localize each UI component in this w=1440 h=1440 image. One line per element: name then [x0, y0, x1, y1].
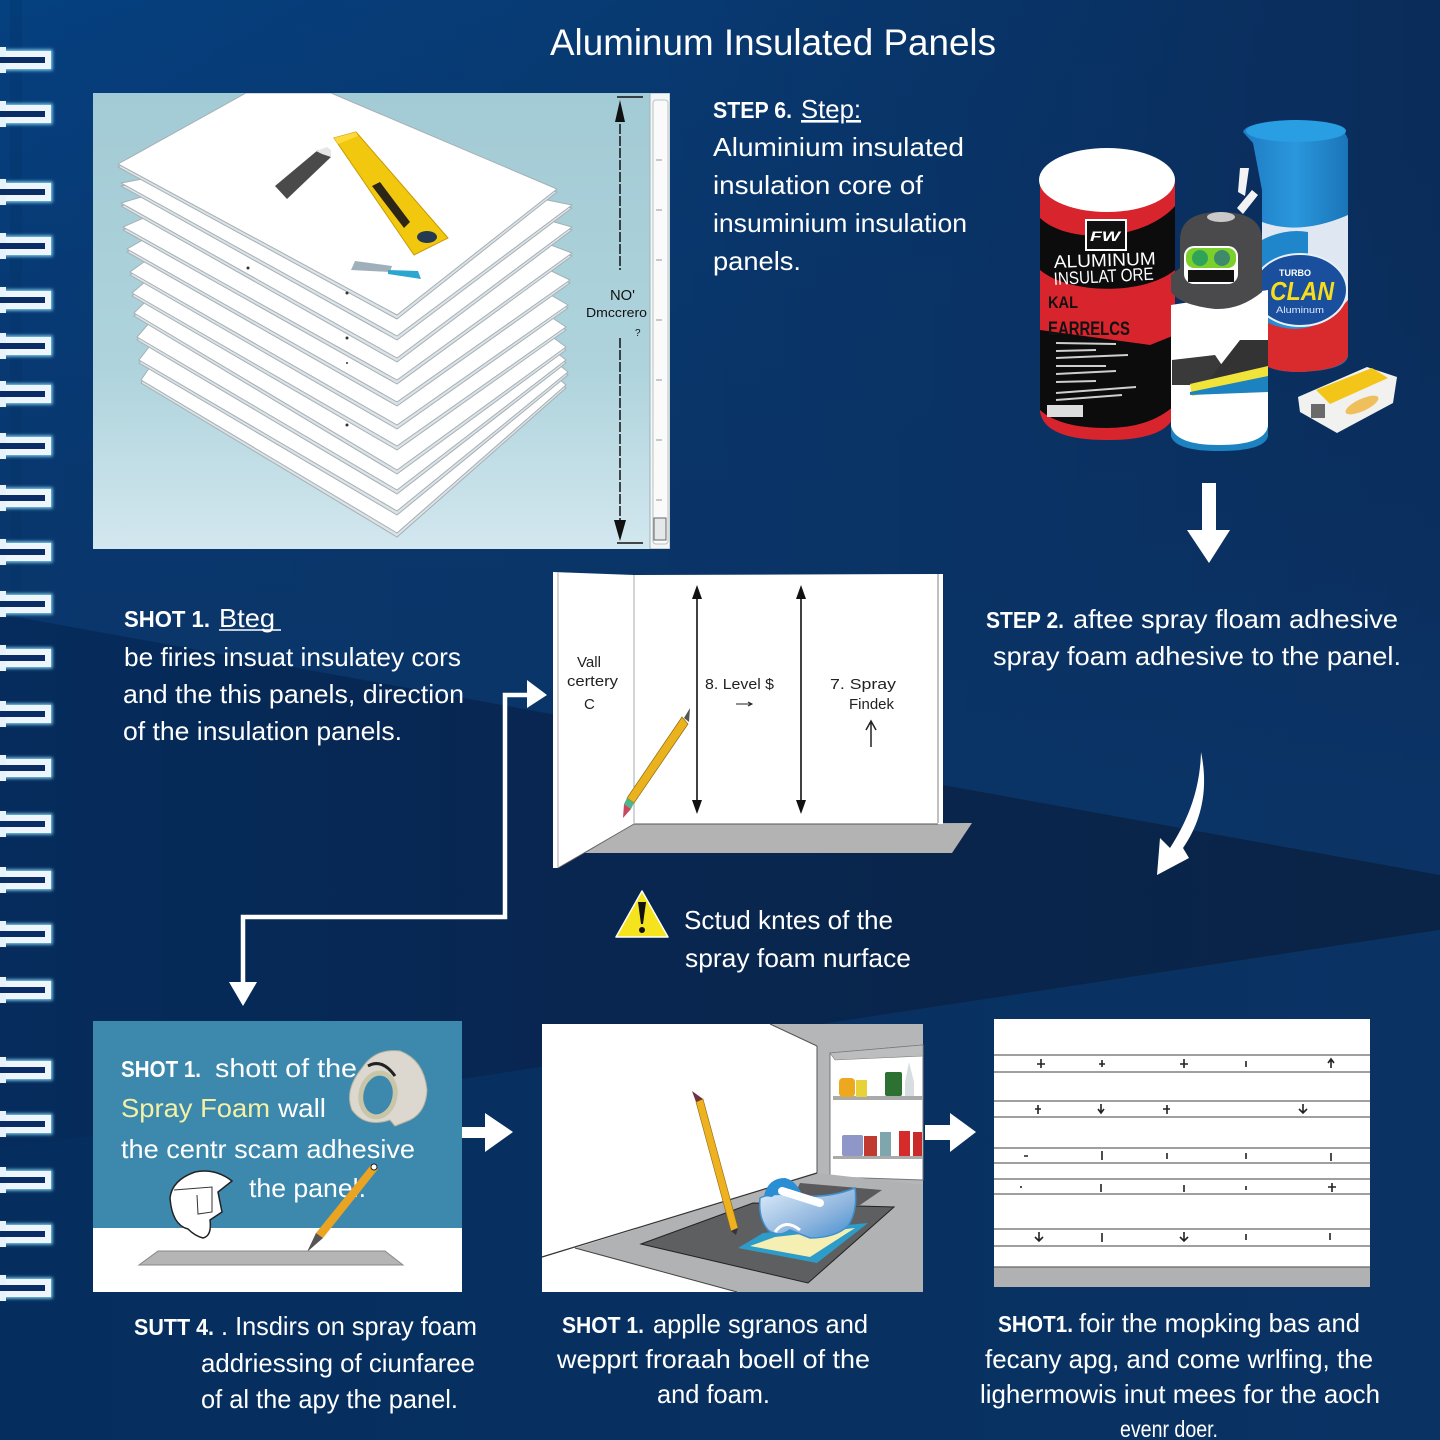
text block: step 6: Step: [801, 94, 861, 124]
panel: floor mat and goggles [542, 1024, 923, 1292]
white can with gauge cap [1171, 212, 1268, 451]
blue spray can [1237, 120, 1348, 372]
title: Aluminum Insulated Panels [550, 22, 996, 63]
icon: utility knife [275, 147, 331, 199]
text block: step 6: insulation core of [713, 170, 924, 200]
layout marks [1021, 1059, 1336, 1242]
icon: goggles [760, 1178, 856, 1238]
text block: shot 1 left: Bteg [219, 603, 275, 633]
text block: shot 1 left: and the this panels, direction [123, 679, 464, 709]
spiral binding [0, 47, 49, 1301]
wall labels: Vall [577, 654, 601, 671]
red and black can [1039, 148, 1175, 440]
red and black can: ALUMINUM [1053, 248, 1156, 272]
icon: scraper [351, 261, 421, 279]
panel text [121, 1053, 415, 1203]
arrow: down from cans [1187, 483, 1230, 563]
wall labels: 8. Level $ [705, 676, 775, 693]
text block: caption three: fecany apg, and come wrlfing, the [985, 1344, 1373, 1374]
text block: shot 1 left: of the insulation panels. [123, 716, 402, 746]
grey bar [139, 1251, 403, 1265]
text block: caption one: addriessing of ciunfaree [201, 1348, 475, 1378]
text block: caption two: and foam. [657, 1379, 770, 1409]
text block: shot 1 left: be firies insuat insulatey cors [124, 642, 461, 672]
text block: caption three: SHOT1. [998, 1311, 1073, 1337]
text block: step 6: Aluminium insulated [713, 132, 964, 162]
screw marks [246, 266, 348, 426]
icon: pencil [307, 1164, 378, 1252]
text block: caption two: SHOT 1. [562, 1312, 644, 1338]
floor mats [790, 1183, 882, 1205]
floor [575, 1173, 923, 1292]
dimension label [587, 290, 646, 336]
ruler strip [650, 93, 670, 549]
panel text: the panel. [249, 1173, 366, 1203]
sponge [738, 1223, 868, 1263]
text block: caption one: . Insdirs on spray foam [221, 1311, 477, 1341]
arrow: to panel three [925, 1113, 976, 1152]
blue spray can: CLAN [1270, 276, 1335, 306]
double arrow 2 [796, 585, 806, 814]
callout: warning: spray foam nurface [685, 943, 911, 973]
icon: pencil [623, 708, 690, 818]
text block: step 6 [713, 94, 967, 276]
dimension label: ? [635, 328, 641, 339]
icon: helmet [170, 1171, 232, 1238]
text block: caption one: of al the apy the panel. [201, 1384, 458, 1414]
panel text: SHOT 1. [121, 1056, 201, 1082]
red and black can: FW [1090, 228, 1122, 244]
text block: step 2: STEP 2. [986, 607, 1064, 633]
shelf unit [830, 1045, 923, 1180]
text block: step 6: insuminium insulation [713, 208, 967, 238]
text block: step 6: panels. [713, 246, 801, 276]
double arrow 1 [692, 585, 702, 814]
panel text: wall [277, 1093, 326, 1123]
wall labels: Findek [849, 696, 894, 713]
text block: caption three: lighermowis inut mees for the aoch [980, 1379, 1380, 1409]
stack of panels [118, 93, 572, 537]
back wall [634, 574, 943, 824]
text block: shot 1 left [123, 603, 464, 746]
wall labels: certery [567, 673, 619, 690]
dimension arrow [614, 97, 643, 543]
product group: adhesive cans [1039, 120, 1397, 451]
text block: step 6: STEP 6. [713, 97, 792, 123]
panel: stacked insulated panels [93, 93, 670, 549]
panel: marked panel lines [994, 1019, 1370, 1287]
arrow: elbow connector [229, 680, 547, 1006]
icon: pencil [692, 1091, 738, 1235]
arrow: to panel two [462, 1113, 513, 1152]
text block: caption three [980, 1308, 1380, 1440]
callout: warning [616, 891, 911, 973]
icon: warning triangle [616, 891, 668, 937]
wall labels [567, 654, 897, 747]
text block: step 2: aftee spray floam adhesive [1073, 604, 1398, 634]
back wall [770, 1024, 923, 1190]
blue spray can: Aluminum [1276, 305, 1324, 315]
text block: caption two [556, 1309, 870, 1409]
red and black can: EARRELCS [1048, 319, 1130, 340]
panel: wall diagram [553, 572, 972, 868]
panel text: Spray Foam [121, 1093, 270, 1123]
floor [585, 823, 972, 853]
side wall [553, 572, 634, 868]
text block: step 2: spray foam adhesive to the panel. [993, 641, 1401, 671]
icon: yellow level [334, 132, 448, 255]
text block: caption two: applle sgranos and [653, 1309, 868, 1339]
text block: shot 1 left: SHOT 1. [124, 606, 210, 632]
text block: caption two: wepprt froraah boell of the [556, 1344, 870, 1374]
yellow connector block [1298, 367, 1397, 433]
text block: caption three: foir the mopking bas and [1079, 1308, 1360, 1338]
icon: tape roll [350, 1051, 427, 1126]
wall labels: 7. Spray [830, 676, 897, 693]
panel text: shott of the [215, 1053, 357, 1083]
panel text: the centr scam adhesive [121, 1134, 415, 1164]
panel: spray foam shot [93, 1021, 462, 1292]
text block: step 2 [986, 604, 1401, 671]
red and black can: KAL [1048, 293, 1078, 312]
text block: caption one: SUTT 4. [134, 1314, 214, 1340]
wall labels: C [584, 696, 595, 713]
callout: warning: Sctud kntes of the [684, 905, 893, 935]
blue spray can: TURBO [1279, 268, 1311, 278]
text block: caption one [134, 1311, 477, 1414]
red and black can: INSULAT ORE [1053, 264, 1154, 289]
arrow: curved [1157, 752, 1204, 875]
dimension label: Dmccrero [586, 305, 647, 320]
dimension label: NO' [610, 287, 635, 304]
